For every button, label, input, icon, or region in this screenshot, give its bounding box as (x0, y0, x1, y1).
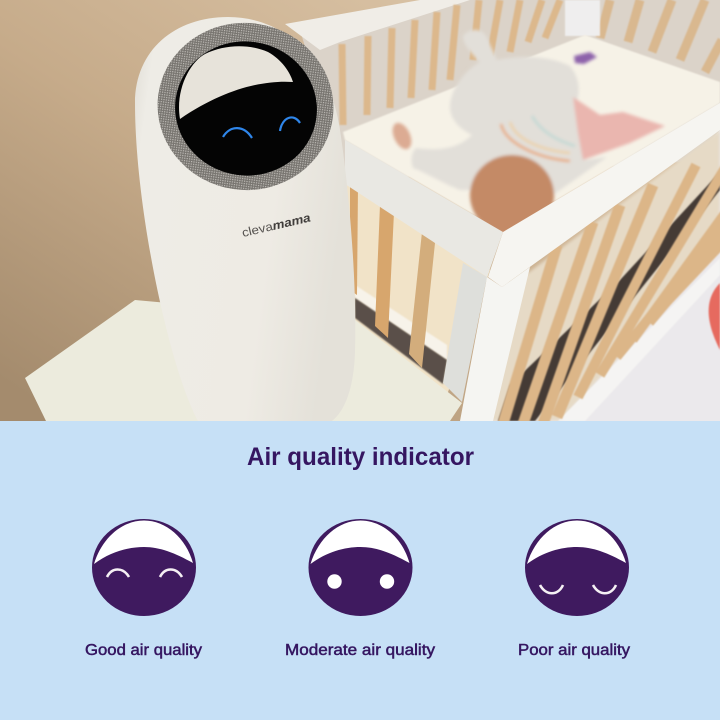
icon: happy face (93, 520, 195, 615)
far right slats (600, 0, 720, 72)
dark mattress base (355, 298, 447, 384)
brand logo: clevamama (241, 210, 312, 240)
right slats (503, 145, 720, 424)
label: moderate: Moderate air quality (285, 642, 435, 659)
indicator: moderate air quality (285, 520, 435, 659)
table (25, 300, 462, 421)
baby foot (390, 121, 414, 151)
baby head (470, 155, 554, 235)
far slats (342, 0, 560, 125)
panel: air quality indicator (0, 421, 720, 720)
front left crib rail (345, 140, 503, 277)
panel background (0, 421, 720, 720)
icon: neutral face (310, 520, 412, 615)
right eye (280, 117, 300, 131)
mattress (343, 35, 720, 232)
photo: purifier beside crib (0, 0, 720, 424)
dark mattress base seen through right slats (498, 172, 720, 421)
far crib post (565, 0, 600, 36)
far crib background (300, 0, 720, 180)
black display (175, 41, 317, 176)
baby body (412, 30, 607, 195)
left slats (350, 180, 435, 368)
left crib panel interior (347, 186, 490, 392)
white mattress edge (355, 285, 447, 360)
corner post right face (460, 267, 530, 421)
corner post left face (443, 263, 487, 402)
far left crib rail (285, 0, 470, 50)
red blanket (709, 283, 720, 350)
right crib rail (488, 103, 720, 287)
white dome (179, 46, 293, 119)
left eye (223, 128, 252, 138)
crib base beam (558, 258, 720, 421)
pink bib (573, 97, 665, 160)
baby (389, 30, 665, 235)
label: poor: Poor air quality (518, 642, 630, 659)
indicator: good air quality (85, 520, 202, 659)
label: good: Good air quality (85, 642, 202, 659)
purifier body (135, 17, 355, 421)
indicator: poor air quality (518, 520, 630, 659)
floor (470, 130, 720, 421)
purple tag (574, 52, 597, 64)
purifier (135, 12, 355, 421)
icon: sleepy face (526, 520, 628, 615)
right side interior (490, 130, 720, 421)
mesh ring (158, 22, 334, 190)
rainbow on suit (501, 116, 575, 161)
title: Air quality indicator (247, 443, 474, 471)
wall (0, 0, 720, 421)
